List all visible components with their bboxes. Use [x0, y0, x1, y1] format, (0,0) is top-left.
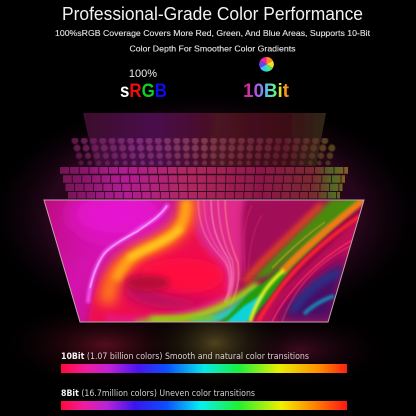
artwork: cyan wedge: [224, 292, 266, 324]
artwork: red core: [140, 258, 224, 294]
10Bit label: 10Bit (1.07 billion colors) Smooth and natural color transitions: [61, 352, 309, 362]
icon: colour wheel: [259, 57, 274, 72]
10Bit gradient bar: [61, 364, 347, 373]
artwork: left magenta wash: [68, 188, 168, 240]
layer: LED tile grid: [60, 170, 348, 196]
artwork: red blob: [88, 196, 240, 326]
subtitle: 100%sRGB Coverage Covers More Red, Green, And Blue Areas, Supports 10-Bit: [55, 29, 371, 38]
subtitle: Color Depth For Smoother Color Gradients: [130, 44, 296, 54]
panel border: [44, 200, 364, 322]
artwork: orange band: [282, 198, 366, 272]
layer: back colour panel: [83, 113, 326, 166]
10Bit badge: [243, 57, 290, 102]
8Bit gradient bar: [61, 401, 347, 410]
layer: LED dots: [75, 141, 334, 163]
artwork: orange yellow bands: [107, 196, 187, 304]
background glow: [0, 90, 416, 393]
artwork: dark magenta hollow: [125, 280, 222, 309]
artwork: upper right crimson: [242, 200, 274, 244]
artwork: pink flowing stripes: [194, 200, 247, 298]
8Bit label: 8Bit (16.7million colors) Uneven color transitions: [61, 389, 255, 399]
artwork: bottom green glow: [135, 317, 215, 324]
artwork: lower right corner: [252, 220, 358, 322]
subtitle: [55, 29, 371, 54]
artwork: stripe highlights: [198, 196, 262, 305]
artwork: white glowing edge: [88, 204, 168, 303]
sRGB badge: [120, 68, 167, 102]
artwork: yellow streak: [250, 270, 284, 322]
artwork: red streaks: [258, 216, 360, 322]
artwork: green band: [218, 200, 360, 322]
sRGB badge: 100%: [129, 68, 157, 80]
sRGB badge: sRGB: [120, 81, 167, 102]
artwork: rainbow bottom sweep: [150, 284, 258, 320]
title: Professional-Grade Color Performance: [62, 4, 363, 24]
10Bit badge: 10Bit: [243, 81, 290, 102]
main display panel: [43, 200, 365, 322]
